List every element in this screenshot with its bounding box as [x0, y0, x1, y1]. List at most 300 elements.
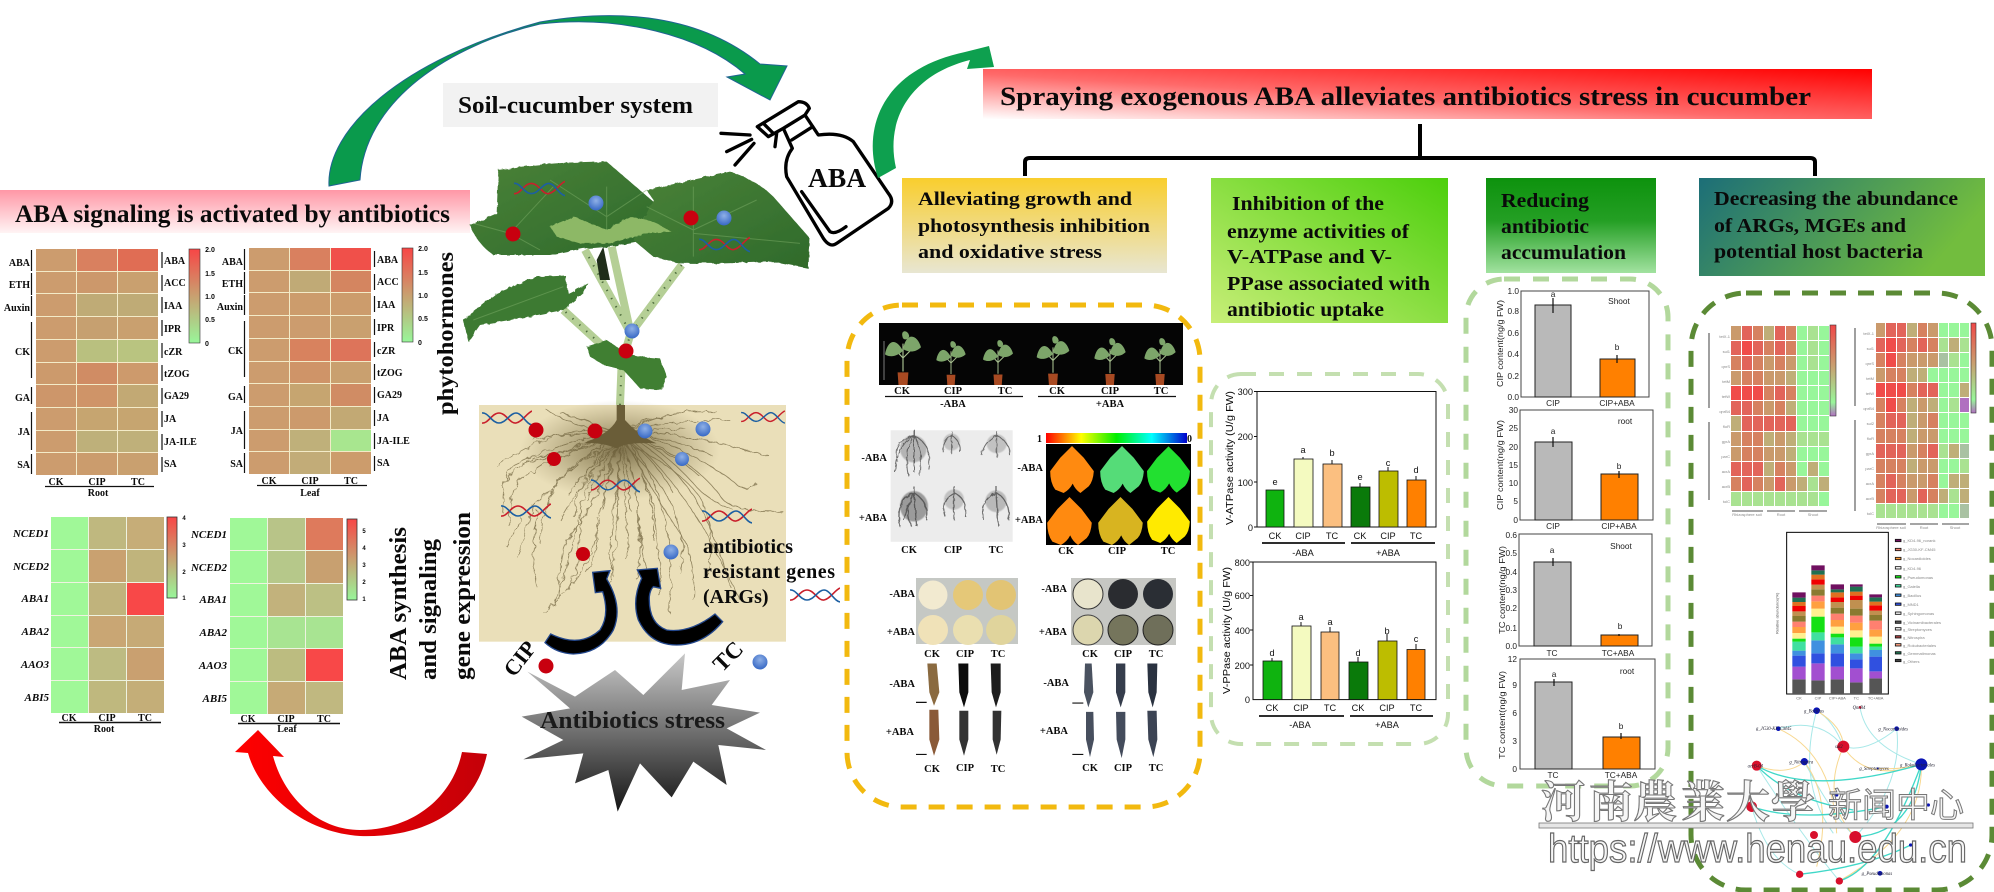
- left heatmap labels: parC: [1721, 454, 1730, 459]
- gene leaf heatmap labels: NCED1: [190, 529, 227, 541]
- network diagram: g_JG30-KF-CM45: [1756, 727, 1792, 732]
- panel: growth and photosynthesis photos: -ABA: [889, 589, 915, 600]
- panel: growth and photosynthesis photos: +ABA: [1040, 726, 1068, 737]
- left heatmap labels: [1709, 325, 1836, 517]
- label: CIP: CIP: [498, 636, 541, 681]
- left heatmap labels: gyrA: [1722, 439, 1730, 444]
- bar chart: CIP root: 25: [1509, 423, 1518, 433]
- big green arrow to sprayer: [329, 16, 787, 186]
- box: inhibition of enzyme activities: V-ATPase and V-: [1227, 246, 1392, 268]
- stacked bar legend: g_Bacillus: [1903, 593, 1921, 598]
- phytohormones root heatmap labels: cZR: [164, 347, 183, 358]
- stacked bar legend: g_KD4-96: [1903, 566, 1922, 571]
- right heatmap labels: sul1: [1867, 346, 1875, 351]
- bar chart: CIP shoot: 0.4: [1507, 349, 1519, 359]
- right heatmap labels: qnrB4: [1863, 406, 1875, 411]
- bar chart: V-PPase activity: d: [1269, 648, 1275, 658]
- right heatmap labels: tetX-1: [1863, 331, 1875, 336]
- bar chart: TC root: root: [1620, 666, 1635, 676]
- right heatmap labels: tolC: [1867, 511, 1874, 516]
- bar chart: CIP root: [1495, 405, 1653, 531]
- heatmap: ARG left: [1731, 326, 1829, 506]
- phytohormones root heatmap labels: 0: [205, 341, 209, 348]
- box: inhibition of enzyme activities: PPase associated with: [1227, 273, 1430, 295]
- label: antibiotics resistant genes (ARGs): antibiotics: [703, 536, 793, 558]
- bar chart: V-ATPase activity: e: [1272, 477, 1278, 487]
- phytohormones leaf heatmap labels: 0: [418, 340, 422, 347]
- box: decreasing the abundance: potential host bacteria: [1714, 241, 1923, 263]
- starburst: Antibiotics stress: Antibiotics stress: [540, 708, 725, 734]
- bar chart: TC root: TC content(ng/g FW): [1497, 671, 1507, 759]
- bar chart: TC root: 3: [1512, 736, 1517, 746]
- bar chart: CIP root: 0: [1513, 515, 1518, 525]
- bar chart: V-ATPase activity: 300: [1238, 387, 1253, 397]
- photo: stained discs right: [1071, 578, 1176, 645]
- right heatmap labels: parC: [1865, 466, 1874, 471]
- left heatmap labels: Root: [1777, 512, 1786, 517]
- bar chart: V-ATPase activity: -ABA: [1292, 548, 1315, 558]
- gene leaf heatmap labels: ABA1: [198, 594, 227, 606]
- left heatmap labels: tetM: [1722, 379, 1730, 384]
- left heatmap labels: qnrS: [1722, 364, 1730, 369]
- panel: growth and photosynthesis photos: TC: [991, 764, 1005, 775]
- bar chart: V-ATPase activity: 200: [1238, 432, 1253, 442]
- green arrow to main banner: [873, 46, 994, 178]
- curved black arrows into roots: [545, 568, 723, 654]
- box: decreasing the abundance: Decreasing the abundance: [1714, 188, 1958, 210]
- bar chart: V-PPase activity: d: [1355, 648, 1361, 658]
- bar chart: V-ATPase activity: c: [1386, 458, 1391, 468]
- bar chart: CIP shoot: 0.2: [1507, 371, 1519, 381]
- panel: growth and photosynthesis photos: +ABA: [1015, 515, 1043, 526]
- panel: enzyme activity bar charts: [1211, 374, 1448, 744]
- bar chart: TC shoot: [1497, 530, 1652, 658]
- phytohormones leaf heatmap labels: CK: [228, 346, 243, 357]
- bar chart: CIP shoot: CIP content(ng/g FW): [1495, 300, 1505, 387]
- bar chart: V-PPase activity: b: [1384, 626, 1390, 636]
- stacked bar legend: g_Gemmatimonas: [1903, 651, 1936, 656]
- network diagram: QnrB4: [1853, 706, 1866, 711]
- phytohormones leaf heatmap labels: 0.5: [418, 316, 428, 323]
- bar chart: CIP root: b: [1617, 461, 1622, 471]
- box: reducing antibiotic accumulation: [1486, 178, 1656, 273]
- gene leaf heatmap labels: 4: [362, 546, 366, 552]
- bar chart: CIP shoot: 0.6: [1507, 328, 1519, 338]
- bar chart: V-PPase activity: CK: [1352, 703, 1365, 713]
- stacked bar legend: [1895, 538, 1941, 664]
- icons: TC blue dots: [588, 196, 768, 670]
- stacked bar legend: g_Gaiella: [1903, 584, 1921, 589]
- gene leaf heatmap labels: Leaf: [277, 724, 297, 735]
- phytohormones root heatmap labels: IAA: [164, 301, 183, 312]
- bar chart: CIP root: 15: [1509, 460, 1518, 470]
- bar chart: CIP shoot: a: [1551, 289, 1556, 299]
- bar chart: V-PPase activity: +ABA: [1375, 720, 1400, 730]
- bar chart: CIP root: a: [1551, 426, 1556, 436]
- network diagram: g_Pseudomonas: [1862, 872, 1892, 877]
- bar chart: V-ATPase activity: CIP: [1380, 531, 1396, 541]
- bar chart: V-PPase activity: CK: [1266, 703, 1279, 713]
- heading: ABA synthesis and signaling gene expression: and signaling: [416, 539, 442, 680]
- bar chart: V-ATPase activity: d: [1413, 465, 1419, 475]
- bar chart: TC shoot: 0.6: [1505, 530, 1517, 540]
- phytohormones root heatmap labels: tZOG: [164, 369, 190, 380]
- gene root heatmap labels: NCED1: [12, 528, 49, 540]
- panel: growth and photosynthesis photos: 1: [1037, 434, 1042, 445]
- bar chart: V-ATPase activity: TC: [1410, 531, 1422, 541]
- bar chart: CIP shoot: CIP+ABA: [1599, 398, 1635, 408]
- photo: chlorophyll fluorescence leaves: [1046, 433, 1191, 545]
- phytohormones root heatmap labels: ABA: [164, 256, 186, 267]
- heatmap: ARG right: [1876, 323, 1969, 518]
- bar chart: TC shoot: 0.3: [1505, 585, 1517, 595]
- right heatmap labels: Rhizosphere soil: [1876, 525, 1906, 530]
- gene root heatmap labels: TC: [138, 713, 152, 724]
- bar chart: V-PPase activity: 800: [1235, 558, 1250, 568]
- photo: stained discs left: [916, 578, 1018, 645]
- stacked bar legend: g_Rokubacteriales: [1903, 643, 1936, 648]
- box: reducing antibiotic accumulation: accumulation: [1501, 242, 1626, 264]
- bar chart: V-PPase activity: CIP: [1293, 703, 1309, 713]
- phytohormones root heatmap labels: 2.0: [205, 247, 215, 254]
- panel: growth and photosynthesis photos: CIP: [944, 545, 963, 556]
- phytohormones leaf heatmap labels: ABA: [377, 255, 399, 266]
- label: Soil-cucumber system: Soil-cucumber system: [458, 93, 693, 119]
- stacked bar legend: g_MND1: [1903, 602, 1920, 607]
- bar chart: CIP shoot: b: [1615, 342, 1620, 352]
- gene leaf heatmap labels: 2: [362, 580, 366, 586]
- gene root heatmap labels: ABA2: [20, 626, 49, 638]
- phytohormones root heatmap labels: IPR: [164, 324, 182, 335]
- right heatmap labels: tetW: [1866, 391, 1874, 396]
- phytohormones leaf heatmap labels: CIP: [301, 476, 319, 487]
- panel: growth and photosynthesis photos: CK: [1049, 386, 1066, 397]
- bar chart: TC shoot: a: [1550, 545, 1555, 555]
- panel: growth and photosynthesis photos: -ABA: [1041, 584, 1067, 595]
- icons: DNA resistance genes: [482, 181, 840, 602]
- left heatmap labels: tolC: [1723, 499, 1730, 504]
- bar chart: CIP root: 20: [1509, 442, 1518, 452]
- right heatmap labels: Shoot: [1950, 525, 1961, 530]
- gene root heatmap labels: Root: [94, 724, 115, 735]
- right heatmap labels: sul2: [1867, 421, 1875, 426]
- panel: growth and photosynthesis photos: -ABA: [1043, 678, 1069, 689]
- bar chart: V-ATPase activity: 100: [1238, 478, 1253, 488]
- box: inhibition of enzyme activities: antibiotic uptake: [1227, 299, 1384, 321]
- panel: growth and photosynthesis photos: [847, 305, 1200, 807]
- left heatmap labels: tetX-1: [1719, 334, 1731, 339]
- stacked bar legend: g_Nitrospira: [1903, 635, 1925, 640]
- panel: growth and photosynthesis photos: CIP: [1101, 386, 1120, 397]
- gene leaf heatmap labels: ABA2: [198, 627, 227, 639]
- network diagram: acrB-04: [1748, 764, 1764, 769]
- phytohormones leaf heatmap labels: Leaf: [300, 488, 320, 499]
- panel: growth and photosynthesis photos: -ABA: [889, 679, 915, 690]
- gene leaf heatmap labels: 1: [362, 597, 366, 603]
- network diagram: g_Nocardioides: [1878, 728, 1908, 733]
- bar chart: V-ATPase activity: CK: [1269, 531, 1282, 541]
- box: alleviating growth: and oxidative stress: [918, 242, 1102, 263]
- phytohormones root heatmap labels: CK: [15, 347, 30, 358]
- phytohormones leaf heatmap labels: ACC: [377, 277, 399, 288]
- bar chart: CIP root: CIP content(ng/g FW): [1495, 420, 1505, 510]
- phytohormones root heatmap labels: ABA: [9, 258, 31, 269]
- phytohormones root heatmap labels: Auxin: [4, 303, 30, 314]
- bar chart: V-ATPase activity: CIP: [1295, 531, 1311, 541]
- right heatmap labels: acrB: [1866, 496, 1874, 501]
- left heatmap labels: tetW: [1722, 394, 1730, 399]
- gene leaf heatmap labels: CK: [240, 714, 256, 725]
- bar chart: V-ATPase activity: CK: [1354, 531, 1367, 541]
- phytohormones leaf heatmap labels: GA: [228, 392, 244, 403]
- right heatmap labels: acrA: [1866, 481, 1874, 486]
- panel: growth and photosynthesis photos: CK: [1058, 546, 1075, 557]
- panel: growth and photosynthesis photos: CIP: [1108, 546, 1127, 557]
- gene leaf heatmap labels: ABI5: [202, 693, 227, 705]
- phytohormones root heatmap labels: GA29: [164, 391, 189, 402]
- gene leaf heatmap labels: TC: [317, 714, 331, 725]
- gene root heatmap labels: AAO3: [20, 659, 49, 671]
- gene leaf heatmap labels: [190, 519, 366, 735]
- box: inhibition of enzyme activities: enzyme activities of: [1227, 221, 1409, 243]
- bar chart: CIP shoot: [1495, 286, 1649, 408]
- phytohormones leaf heatmap labels: 1.5: [418, 270, 428, 277]
- panel: growth and photosynthesis photos: +ABA: [886, 727, 914, 738]
- stacked bar legend: g_Vicinamibacterales: [1903, 620, 1941, 625]
- photo: root scans: [891, 429, 1013, 542]
- stacked bar chart: CIP: [1815, 695, 1822, 700]
- network diagram: g_Rokubacteriales: [1900, 763, 1935, 768]
- label: Soil-cucumber system: [443, 83, 718, 127]
- heatmap: gene expression root: [51, 517, 164, 713]
- panel: growth and photosynthesis photos: CK: [924, 764, 941, 775]
- panel: growth and photosynthesis photos: CK: [901, 545, 918, 556]
- bar chart: V-ATPase activity: 0: [1248, 523, 1253, 533]
- panel: growth and photosynthesis photos: CK: [894, 386, 911, 397]
- panel: growth and photosynthesis photos: -ABA: [1017, 463, 1043, 474]
- phytohormones root heatmap labels: TC: [131, 477, 145, 488]
- phytohormones root heatmap labels: SA: [164, 459, 178, 470]
- panel: growth and photosynthesis photos: CIP: [956, 649, 975, 660]
- panel: growth and photosynthesis photos: TC: [1149, 649, 1163, 660]
- left heatmap labels: Rhizosphere soil: [1732, 512, 1762, 517]
- right heatmap labels: gyrA: [1866, 451, 1874, 456]
- stacked bar legend: g_Pseudomonas: [1903, 575, 1933, 580]
- phytohormones leaf heatmap labels: Auxin: [217, 302, 243, 313]
- bar chart: CIP shoot: 0.8: [1507, 306, 1519, 316]
- panel: growth and photosynthesis photos: +ABA: [1096, 399, 1124, 410]
- bar chart: TC shoot: TC+ABA: [1602, 648, 1635, 658]
- panel: growth and photosynthesis photos: -ABA: [940, 399, 966, 410]
- box: reducing antibiotic accumulation: antibiotic: [1501, 216, 1589, 238]
- bar chart: TC shoot: Shoot: [1610, 541, 1633, 551]
- bar chart: V-PPase activity: [1222, 558, 1436, 730]
- icons: CIP red dots: [506, 210, 698, 674]
- panel: growth and photosynthesis photos: CK: [1082, 763, 1099, 774]
- stacked bar chart: TC+ABA: [1868, 695, 1884, 700]
- phytohormones leaf heatmap labels: ABA: [222, 257, 244, 268]
- phytohormones root heatmap labels: SA: [17, 460, 31, 471]
- bar chart: TC shoot: 0.0: [1505, 641, 1517, 651]
- box: inhibition of enzyme activities: [1211, 178, 1448, 323]
- network diagram: g_Nitrospira: [1789, 760, 1814, 765]
- bar chart: TC root: TC: [1547, 770, 1559, 780]
- icon: spray bottle: [721, 102, 892, 245]
- gene leaf heatmap labels: CIP: [277, 714, 295, 725]
- phytohormones leaf heatmap labels: TC: [344, 476, 358, 487]
- phytohormones root heatmap labels: 1.5: [205, 271, 215, 278]
- phytohormones root heatmap labels: 1.0: [205, 294, 215, 301]
- main banner: [983, 69, 1872, 119]
- watermark: Henan Agricultural University news center: 新闻中心: [1828, 778, 1964, 827]
- panel: growth and photosynthesis photos: CIP: [1114, 649, 1133, 660]
- right heatmap labels: [1855, 323, 1976, 530]
- bar chart: TC shoot: TC content(ng/g FW): [1497, 546, 1507, 634]
- stacked bar legend: g_Sphingomonas: [1903, 611, 1934, 616]
- phytohormones leaf heatmap labels: SA: [230, 459, 244, 470]
- left heatmap labels: acrB: [1722, 484, 1730, 489]
- bar chart: V-PPase activity: TC: [1410, 703, 1422, 713]
- bar chart: CIP root: root: [1618, 416, 1633, 426]
- phytohormones root heatmap labels: JA-ILE: [164, 437, 197, 448]
- panel: growth and photosynthesis photos: TC: [989, 545, 1003, 556]
- panel: growth and photosynthesis photos: TC: [991, 649, 1005, 660]
- bar chart: CIP shoot: CIP: [1546, 398, 1560, 408]
- bar chart: CIP shoot: 0.0: [1507, 392, 1519, 402]
- photo strip: plants: [879, 323, 1183, 385]
- phytohormones leaf heatmap labels: SA: [377, 458, 391, 469]
- panel: growth and photosynthesis photos: CK: [1082, 649, 1099, 660]
- bar chart: TC root: a: [1552, 669, 1557, 679]
- phytohormones leaf heatmap labels: JA-ILE: [377, 436, 410, 447]
- network diagram: g_Bacillus: [1804, 710, 1824, 715]
- gene root heatmap labels: 1: [182, 596, 186, 602]
- bar chart: CIP root: 10: [1509, 478, 1518, 488]
- bar chart: V-PPase activity: c: [1414, 634, 1419, 644]
- heatmap: gene expression leaf: [230, 518, 343, 714]
- bar chart: V-PPase activity: CIP: [1379, 703, 1395, 713]
- phytohormones leaf heatmap labels: [217, 246, 428, 499]
- bar chart: CIP root: 5: [1513, 496, 1518, 506]
- red arrow: [235, 730, 487, 836]
- panel: growth and photosynthesis photos: CIP: [956, 763, 975, 774]
- gene root heatmap labels: NCED2: [12, 561, 49, 573]
- phytohormones leaf heatmap labels: GA29: [377, 390, 402, 401]
- stacked bar chart: Relative abundance(%): [1775, 592, 1780, 634]
- gene root heatmap labels: [12, 516, 186, 735]
- bar chart: CIP root: CIP+ABA: [1601, 521, 1637, 531]
- box: inhibition of enzyme activities: Inhibition of the: [1232, 193, 1384, 215]
- gene leaf heatmap labels: 3: [362, 563, 366, 569]
- bar chart: V-PPase activity: -ABA: [1289, 720, 1312, 730]
- phytohormones root heatmap labels: Root: [88, 488, 109, 499]
- stacked bar chart: TC: [1854, 695, 1859, 700]
- phytohormones root heatmap labels: GA: [15, 393, 31, 404]
- bar chart: V-PPase activity: TC: [1324, 703, 1336, 713]
- phytohormones root heatmap labels: ACC: [164, 278, 186, 289]
- panel: growth and photosynthesis photos: CK: [924, 649, 941, 660]
- left heatmap labels: acrA: [1722, 469, 1730, 474]
- phytohormones root heatmap labels: CIP: [88, 477, 106, 488]
- bar chart: V-PPase activity: V-PPase activity (U/g FW): [1222, 567, 1233, 694]
- panel: growth and photosynthesis photos: TC: [1154, 386, 1168, 397]
- bar chart: V-PPase activity: 0: [1245, 695, 1250, 705]
- gene leaf heatmap labels: NCED2: [190, 562, 227, 574]
- stacked bar legend: g_JG30-KF-CM45: [1903, 547, 1936, 552]
- phytohormones root heatmap labels: JA: [164, 414, 177, 425]
- bar chart: TC shoot: 0.4: [1505, 567, 1517, 577]
- watermark: Henan Agricultural University news center: https://www.henau.edu.cn: [1548, 827, 1967, 871]
- phytohormones leaf heatmap labels: 1.0: [418, 293, 428, 300]
- phytohormones leaf heatmap labels: 2.0: [418, 246, 428, 253]
- network diagram: sul2: [1835, 745, 1843, 750]
- gene root heatmap labels: ABA1: [20, 593, 49, 605]
- bar chart: TC root: TC+ABA: [1605, 770, 1638, 780]
- phytohormones leaf heatmap labels: ETH: [222, 279, 243, 290]
- panel: growth and photosynthesis photos: CIP: [944, 386, 963, 397]
- panel: antibiotic content charts: [1466, 279, 1668, 786]
- gene root heatmap labels: 4: [182, 516, 186, 522]
- stacked bar legend: g_KD4-96_norank: [1903, 538, 1935, 543]
- phytohormones leaf heatmap labels: JA: [377, 413, 390, 424]
- left heatmap labels: floR: [1723, 424, 1730, 429]
- phytohormones root heatmap labels: [4, 247, 215, 499]
- bar chart: CIP shoot: 1.0: [1507, 286, 1519, 296]
- bracket connector: [1025, 124, 1815, 176]
- bar chart: TC shoot: 0.5: [1505, 548, 1517, 558]
- bar chart: TC root: b: [1619, 721, 1624, 731]
- bar chart: V-ATPase activity: TC: [1326, 531, 1338, 541]
- panel: growth and photosynthesis photos: TC: [998, 386, 1012, 397]
- panel: growth and photosynthesis photos: +ABA: [859, 513, 887, 524]
- heading: ABA synthesis and signaling gene expression: ABA synthesis: [386, 527, 412, 680]
- phytohormones root heatmap labels: JA: [18, 427, 31, 438]
- phytohormones root heatmap labels: CK: [48, 477, 64, 488]
- phytohormones root heatmap labels: 0.5: [205, 317, 215, 324]
- banner: ABA signaling: ABA signaling is activated by antibiotics: [15, 201, 450, 228]
- bar chart: V-PPase activity: 600: [1235, 591, 1250, 601]
- left heatmap labels: qnrB4: [1719, 409, 1731, 414]
- bar chart: TC root: 12: [1508, 654, 1517, 664]
- bar chart: V-PPase activity: a: [1298, 612, 1304, 622]
- starburst: Antibiotics stress: [522, 653, 766, 812]
- network diagram: [1746, 706, 1935, 885]
- heading: ABA synthesis and signaling gene expression: [386, 512, 476, 680]
- label: TC: TC: [708, 636, 748, 677]
- photo: root tips: [916, 663, 1157, 758]
- phytohormones leaf heatmap labels: IAA: [377, 300, 396, 311]
- panel: growth and photosynthesis photos: TC: [1161, 546, 1175, 557]
- network diagram: g_Streptomyces: [1859, 767, 1889, 772]
- bar chart: TC shoot: b: [1618, 621, 1623, 631]
- phytohormones root heatmap labels: ETH: [9, 280, 30, 291]
- phytohormones leaf heatmap labels: JA: [231, 426, 244, 437]
- panel: growth and photosynthesis photos: CIP: [1114, 763, 1133, 774]
- stacked bar chart: [1775, 532, 1888, 700]
- bar chart: V-PPase activity: 200: [1235, 661, 1250, 671]
- illustration: soil with roots: [479, 400, 786, 642]
- right heatmap labels: Root: [1920, 525, 1929, 530]
- label: antibiotics resistant genes (ARGs): resistant genes: [703, 561, 835, 583]
- right heatmap labels: qnrS: [1866, 361, 1874, 366]
- phytohormones leaf heatmap labels: tZOG: [377, 368, 403, 379]
- bar chart: TC shoot: 0.1: [1505, 623, 1517, 633]
- gene root heatmap labels: CIP: [98, 713, 116, 724]
- label: ABA on bottle: ABA: [808, 162, 866, 193]
- heatmap: phytohormones leaf: [249, 248, 371, 474]
- gene root heatmap labels: 2: [182, 570, 186, 576]
- box: decreasing the abundance: of ARGs, MGEs and: [1714, 215, 1906, 237]
